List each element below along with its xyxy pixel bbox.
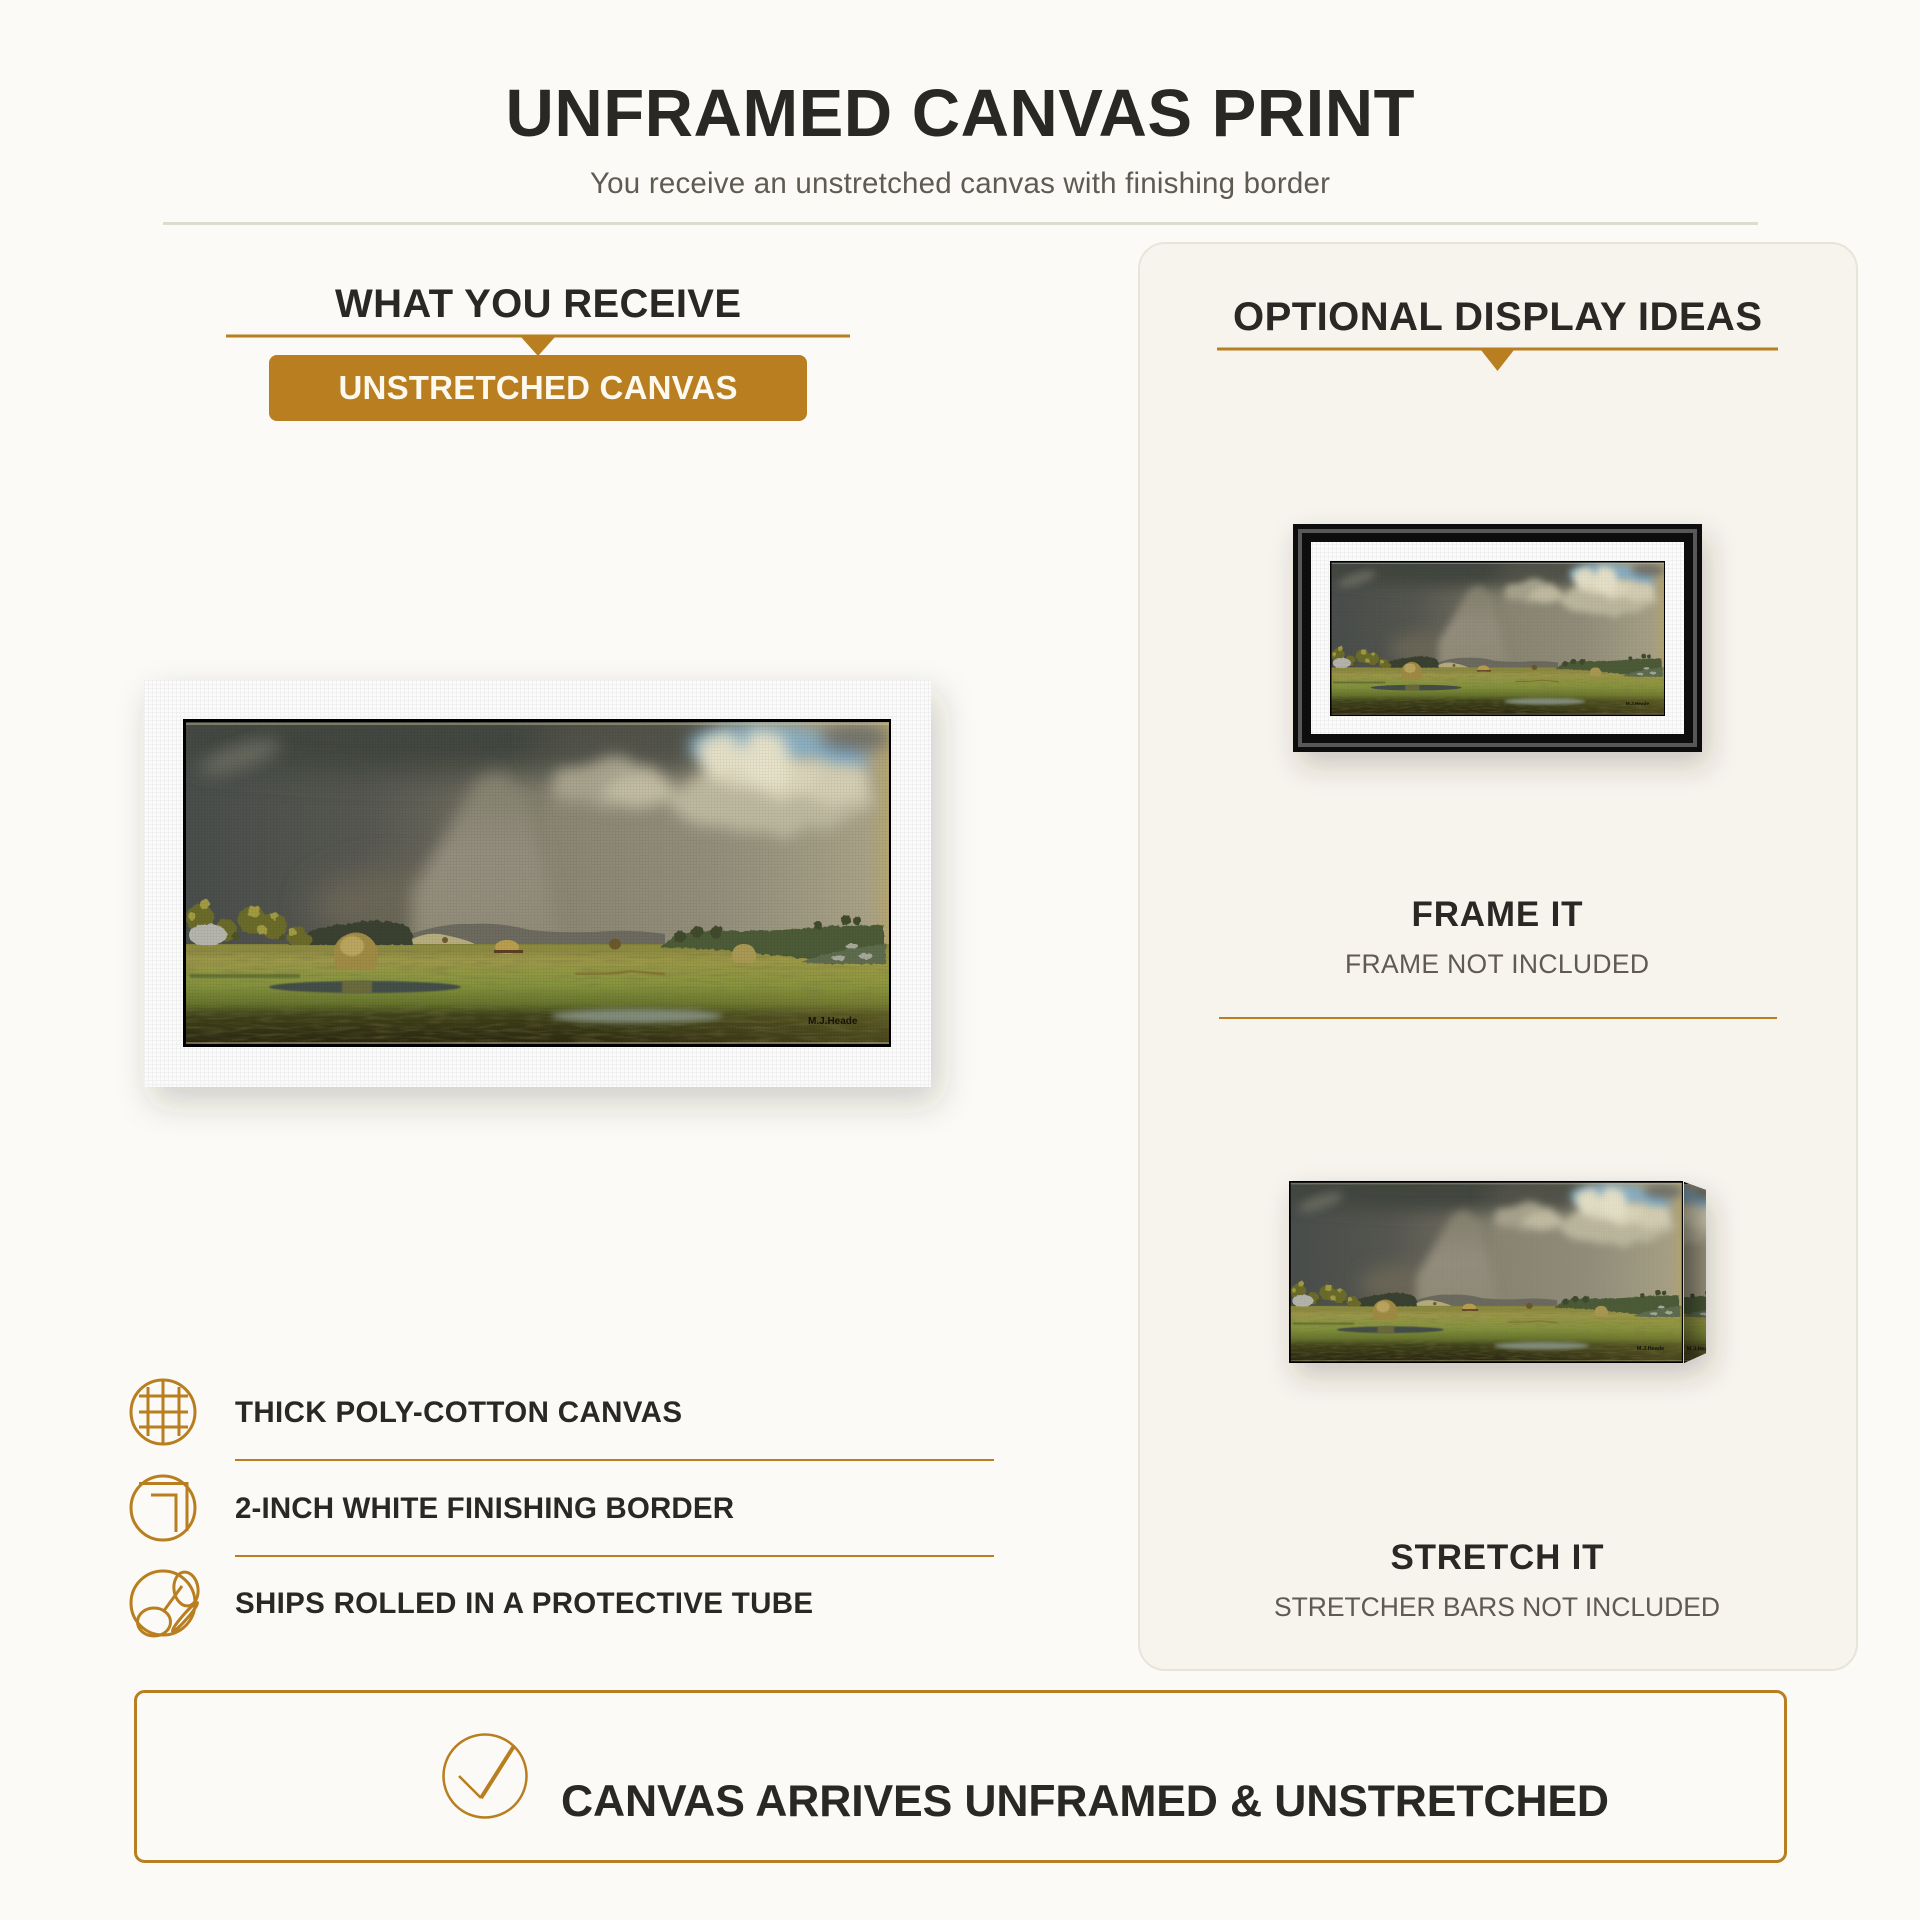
- arrow: what you receive: [521, 337, 555, 356]
- badge: unstretched canvas: UNSTRETCHED CANVAS: [338, 369, 738, 406]
- framed canvas mockup: [1293, 524, 1702, 752]
- heading: optional display ideas: OPTIONAL DISPLAY IDEAS: [1233, 295, 1762, 339]
- callout: canvas arrives unframed and unstretched: [136, 1692, 1786, 1862]
- feature: ships rolled in a protective tube: SHIPS ROLLED IN A PROTECTIVE TUBE: [235, 1587, 813, 1620]
- stretched canvas mockup: [1271, 1172, 1733, 1363]
- badge: unstretched canvas: [269, 355, 807, 421]
- feature: thick poly-cotton canvas: THICK POLY-COTTON CANVAS: [235, 1396, 682, 1429]
- callout: canvas arrives unframed and unstretched: CANVAS ARRIVES UNFRAMED & UNSTRETCHED: [561, 1777, 1609, 1826]
- note: frame not included: FRAME NOT INCLUDED: [1345, 949, 1649, 979]
- feature: thick poly-cotton canvas: [131, 1380, 682, 1444]
- icon: rolled tube: [131, 1570, 200, 1636]
- panel: optional display ideas: [1139, 243, 1857, 1670]
- heading: what you receive: WHAT YOU RECEIVE: [335, 282, 741, 326]
- label: frame it: FRAME IT: [1412, 895, 1582, 934]
- note: stretcher bars not included: STRETCHER BARS NOT INCLUDED: [1274, 1592, 1720, 1622]
- subtitle: You receive an unstretched canvas with finishing border: [590, 167, 1330, 200]
- icon: check mark: [444, 1734, 526, 1818]
- feature: 2-inch white finishing border: 2-INCH WHITE FINISHING BORDER: [235, 1492, 734, 1525]
- label: stretch it: STRETCH IT: [1390, 1538, 1604, 1577]
- feature: 2-inch white finishing border: [131, 1476, 734, 1540]
- unstretched canvas with white border: [144, 680, 931, 1087]
- icon: canvas weave: [131, 1380, 195, 1444]
- feature: ships rolled in a protective tube: [131, 1570, 813, 1636]
- icon: border corner: [131, 1476, 195, 1540]
- arrow: optional display ideas: [1481, 350, 1514, 371]
- title: UNFRAMED CANVAS PRINT: [506, 76, 1415, 151]
